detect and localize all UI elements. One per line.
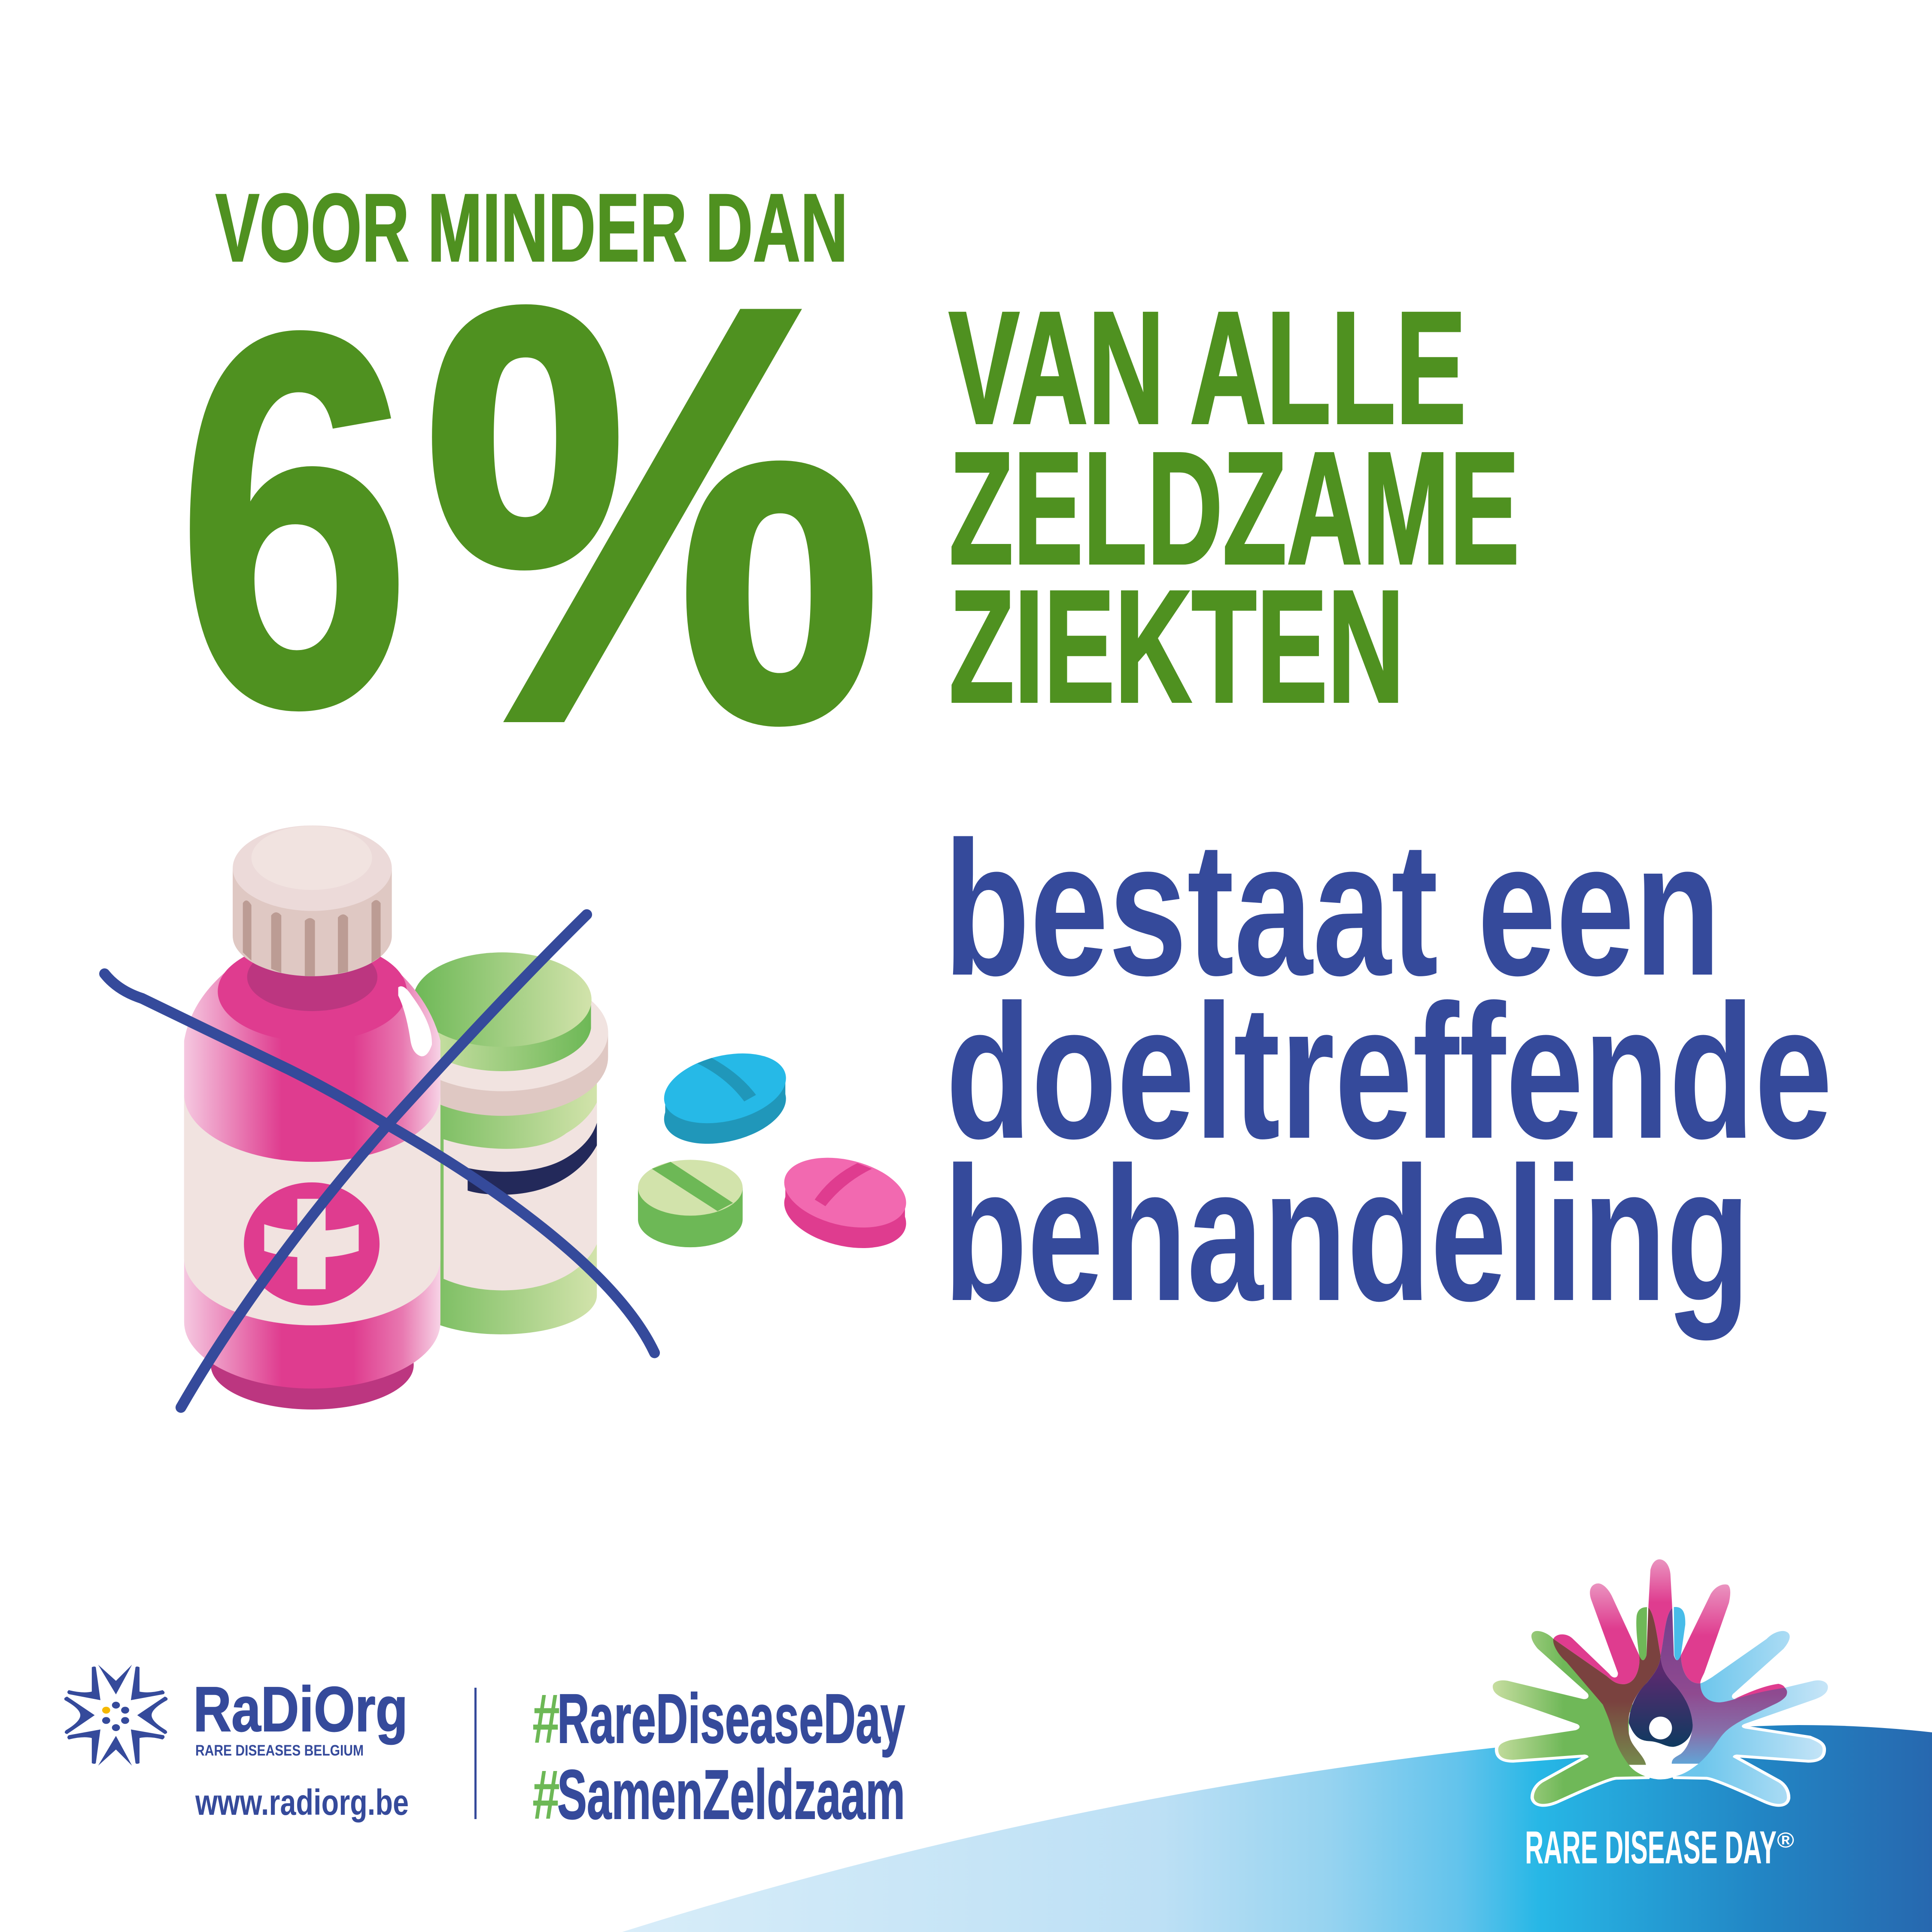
icon: RaDiOrg star	[64, 1665, 167, 1766]
tagline: RARE DISEASES BELGIUM	[195, 1742, 364, 1759]
pink right fingers	[1681, 1584, 1785, 1699]
logo: RaDiOrg	[64, 1665, 409, 1823]
blue tablet	[650, 1040, 799, 1157]
line: zeldzame: ZELDZAME	[949, 419, 1519, 597]
blue hand	[1657, 1607, 1828, 1804]
hashtag: RareDiseaseDay: #	[532, 1679, 560, 1758]
line: van alle: VAN ALLE	[949, 278, 1466, 457]
percent sign: %	[423, 186, 882, 843]
hashtag: SamenZeldzaam: SamenZeldzaam	[557, 1755, 905, 1834]
logo: Rare Disease Day hands	[1493, 1559, 1828, 1804]
digit 6: 6	[176, 222, 412, 817]
icon: medical cross	[244, 1182, 380, 1306]
big number: 6%	[176, 186, 882, 843]
line: ziekten: ZIEKTEN	[949, 557, 1404, 735]
website: www.radiorg.be	[195, 1782, 409, 1823]
pink tablet	[771, 1145, 920, 1261]
pink left fingers	[1553, 1583, 1640, 1684]
blue cross-out strokes	[105, 914, 655, 1407]
hashtag: SamenZeldzaam: #	[532, 1755, 560, 1834]
illustration: crossed-out medicine	[105, 826, 920, 1410]
subheading: bestaat een doeltreffende behandeling	[944, 802, 1832, 1342]
divider	[474, 1688, 477, 1819]
centre figure base	[1629, 1712, 1698, 1780]
purple overlap	[1661, 1608, 1787, 1764]
heading: voor minder dan: VOOR MINDER DAN	[216, 173, 848, 282]
hashtags	[532, 1679, 905, 1834]
pink centre finger	[1648, 1559, 1672, 1656]
hashtag: RareDiseaseDay	[532, 1679, 905, 1758]
green pill bottle	[397, 952, 608, 1334]
pink bottle	[184, 826, 440, 1410]
heading: van alle zeldzame ziekten	[949, 278, 1519, 735]
background wave	[622, 1725, 1932, 1932]
green tablet	[638, 1160, 743, 1247]
green hand	[1493, 1607, 1668, 1804]
hashtag: RareDiseaseDay: RareDiseaseDay	[557, 1679, 905, 1758]
hashtag: SamenZeldzaam	[532, 1755, 905, 1834]
label: rare disease day	[1525, 1821, 1794, 1873]
brown overlap	[1553, 1607, 1661, 1765]
centre drop figure	[1629, 1656, 1692, 1747]
bottle cap	[233, 826, 392, 976]
label: rare disease day: ®	[1777, 1828, 1794, 1852]
wordmark: RaDiOrg	[193, 1674, 408, 1745]
